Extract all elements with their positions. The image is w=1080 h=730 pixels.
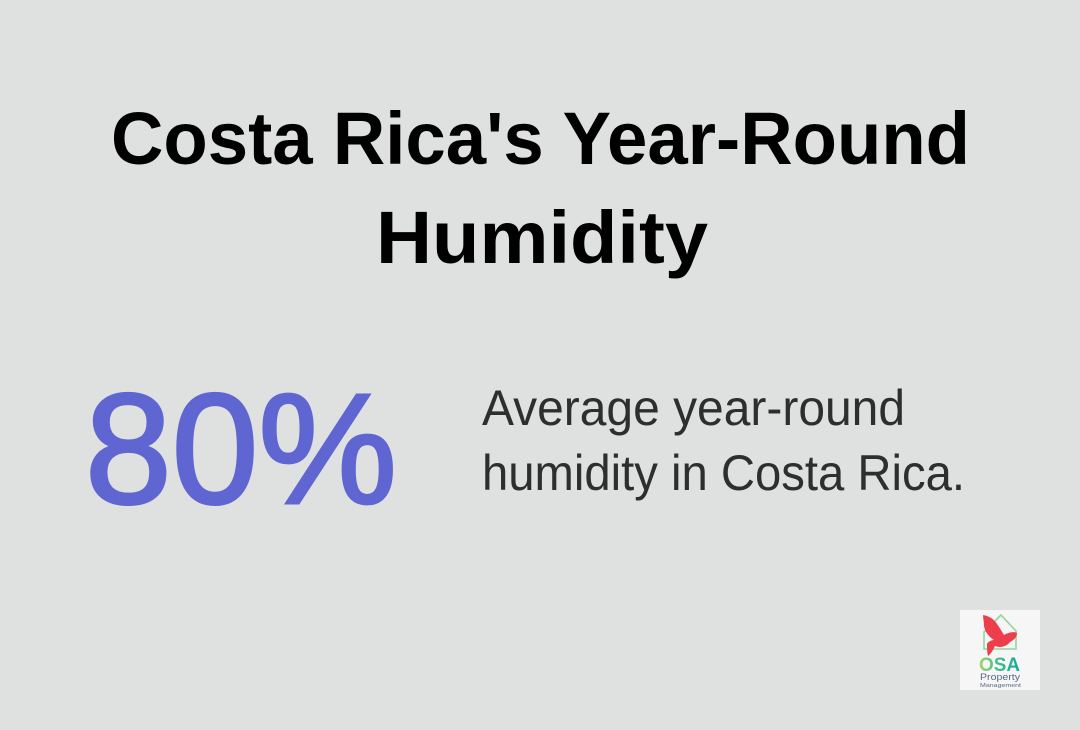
- icon: red bird: [983, 615, 1017, 656]
- logo wordmark: OSA: [979, 655, 1020, 676]
- description text: [482, 380, 965, 501]
- description text: Average year-round: [482, 380, 905, 436]
- title: Costa Rica's Year-Round: [111, 97, 970, 180]
- logo small text: Management: [980, 683, 1022, 689]
- icon: house outline: [984, 615, 1016, 649]
- title: Humidity: [376, 196, 708, 279]
- logo: OSA Property Management: [960, 610, 1040, 690]
- title: [111, 97, 970, 279]
- logo subtitle: Property: [980, 672, 1021, 682]
- description text: humidity in Costa Rica.: [482, 445, 965, 501]
- statistic: 80%: 80%: [85, 362, 397, 537]
